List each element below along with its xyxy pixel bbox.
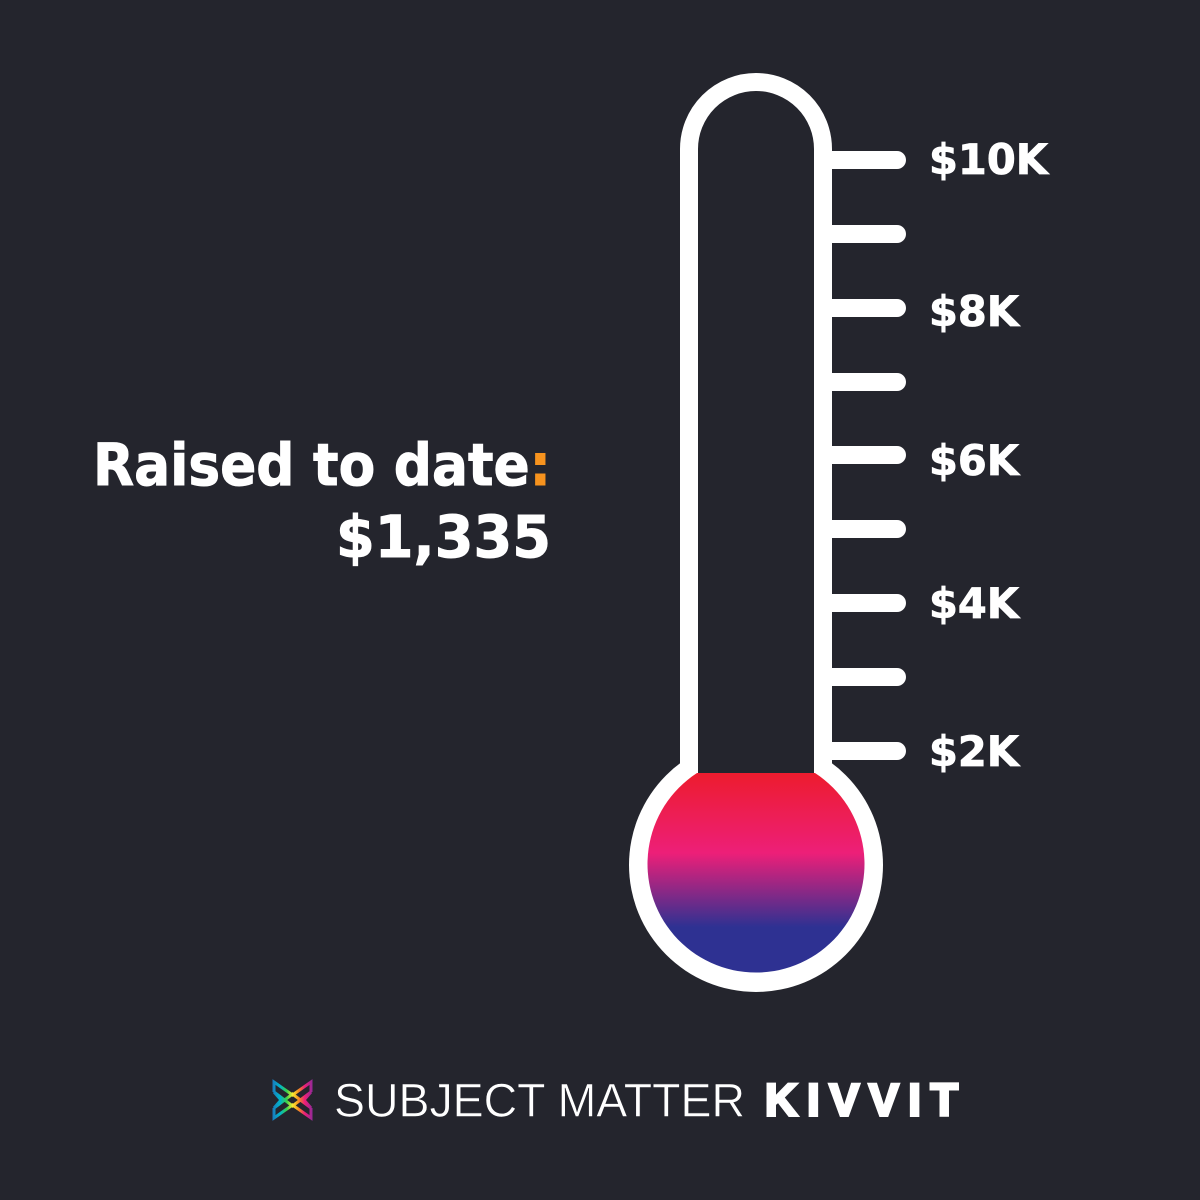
scale labels [929, 135, 1049, 776]
scale tick marks [825, 160, 897, 751]
tube outline [689, 82, 823, 790]
amount raised: $1,335 [336, 503, 551, 571]
wordmark: Subject Matter: SUBJECT MATTER [334, 1074, 745, 1126]
label: $6K: $6K [929, 436, 1020, 485]
bulb outline [629, 738, 883, 992]
thermometer [629, 82, 897, 992]
label: $10K: $10K [929, 135, 1049, 184]
label: $8K: $8K [929, 287, 1020, 336]
label: raised to date: Raised to date: [93, 431, 551, 499]
wordmark: Kivvit: KIVVIT [765, 1074, 958, 1126]
raised to date callout [93, 431, 551, 571]
bulb mercury fill [648, 773, 865, 973]
icon: woven rainbow butterfly mark [274, 1082, 311, 1118]
label: $2K: $2K [929, 727, 1020, 776]
label: $4K: $4K [929, 579, 1020, 628]
footer logo [274, 1074, 958, 1126]
